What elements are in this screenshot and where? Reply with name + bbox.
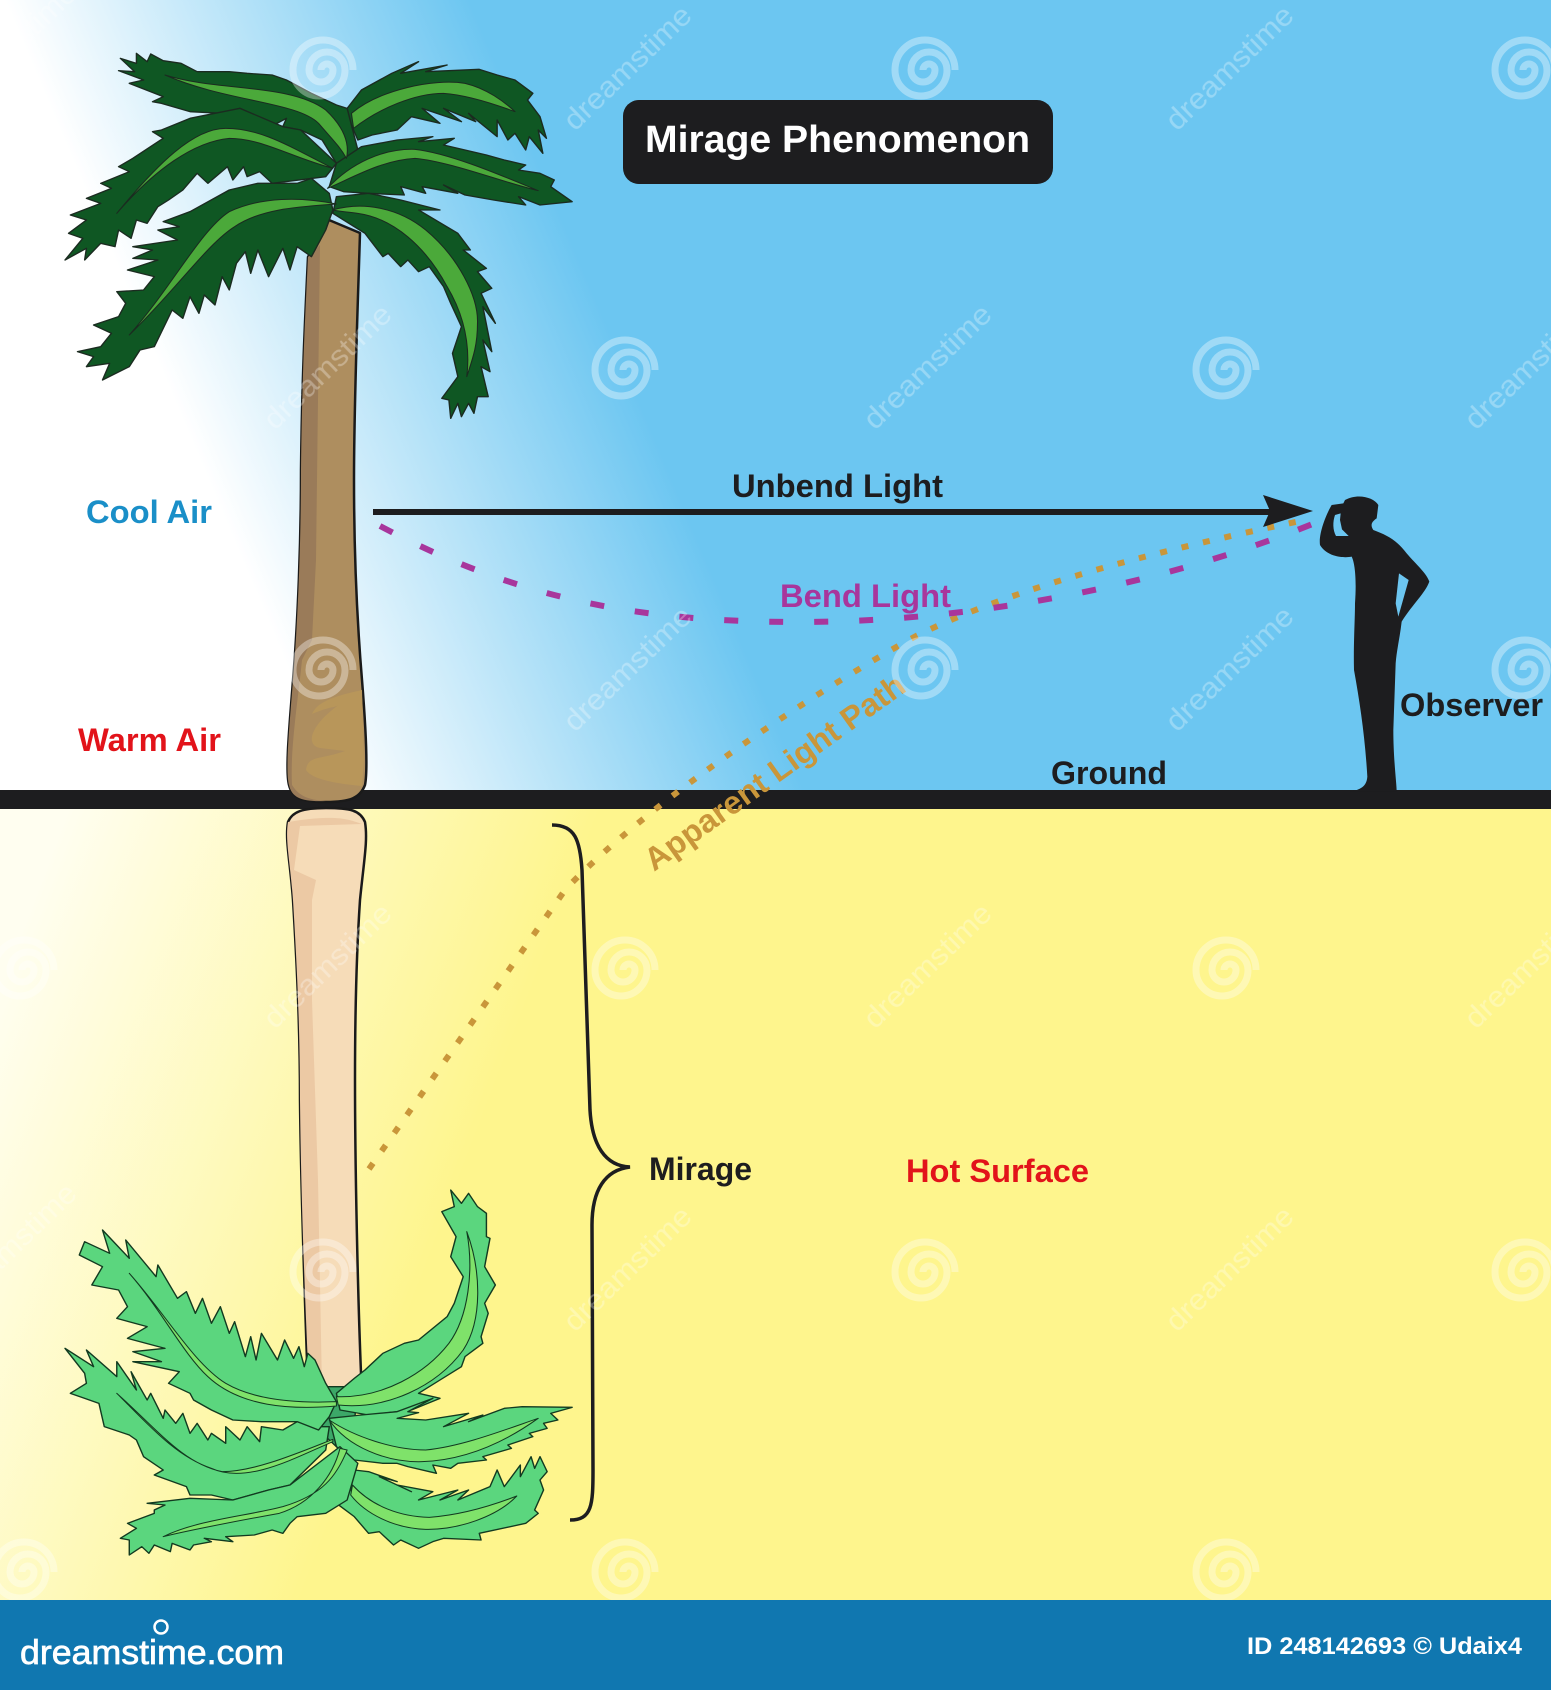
palm fronds (65, 53, 572, 418)
label: cool air: Cool Air (86, 494, 212, 530)
palm trunk (288, 220, 366, 802)
palm tree: mirage reflection (65, 808, 572, 1555)
ground line (0, 790, 1551, 809)
mirage brace (552, 825, 630, 1520)
footer logo: dreamstime.com (20, 1634, 284, 1672)
reflected trunk (287, 808, 366, 1390)
apparent light path: orange dotted line (369, 519, 1310, 1169)
sky background: cool air gradient (0, 0, 1551, 791)
footer bar (0, 1600, 1551, 1690)
label: apparent light path: Apparent Light Path (637, 667, 912, 878)
bend light: purple dashed curve (380, 523, 1315, 622)
title badge (623, 100, 1053, 184)
palm tree: real, above ground (65, 53, 572, 802)
watermark text: dreamstime (257, 298, 399, 436)
footer swirl mark (154, 1620, 168, 1634)
watermark text (0, 0, 1551, 1338)
hot surface background: yellow gradient (0, 808, 1551, 1600)
reflected fronds (65, 1190, 572, 1555)
label: mirage: Mirage (649, 1151, 752, 1187)
footer image id: ID 248142693 © Udaix4 (1247, 1633, 1523, 1660)
watermark text: dreamstime (557, 1200, 699, 1338)
observer silhouette (1320, 496, 1429, 792)
label: ground: Ground (1051, 755, 1167, 791)
watermark text: dreamstime (1159, 1200, 1301, 1338)
watermark text: dreamstime (257, 897, 399, 1035)
label: warm air: Warm Air (78, 722, 221, 758)
label: bend light: Bend Light (780, 578, 951, 614)
watermark text: dreamstime (557, 600, 699, 738)
label: observer: Observer (1400, 687, 1543, 723)
label: unbend light: Unbend Light (732, 468, 943, 504)
unbend light: straight arrow (373, 495, 1313, 527)
watermark text: dreamstime (857, 897, 999, 1035)
watermark text: dreamstime (857, 298, 999, 436)
watermark text: dreamstime (557, 0, 699, 137)
watermark text: dreamstime (1159, 0, 1301, 137)
label: hot surface: Hot Surface (906, 1153, 1089, 1189)
watermark text: dreamstime (1159, 600, 1301, 738)
title badge: Mirage Phenomenon (645, 119, 1030, 161)
